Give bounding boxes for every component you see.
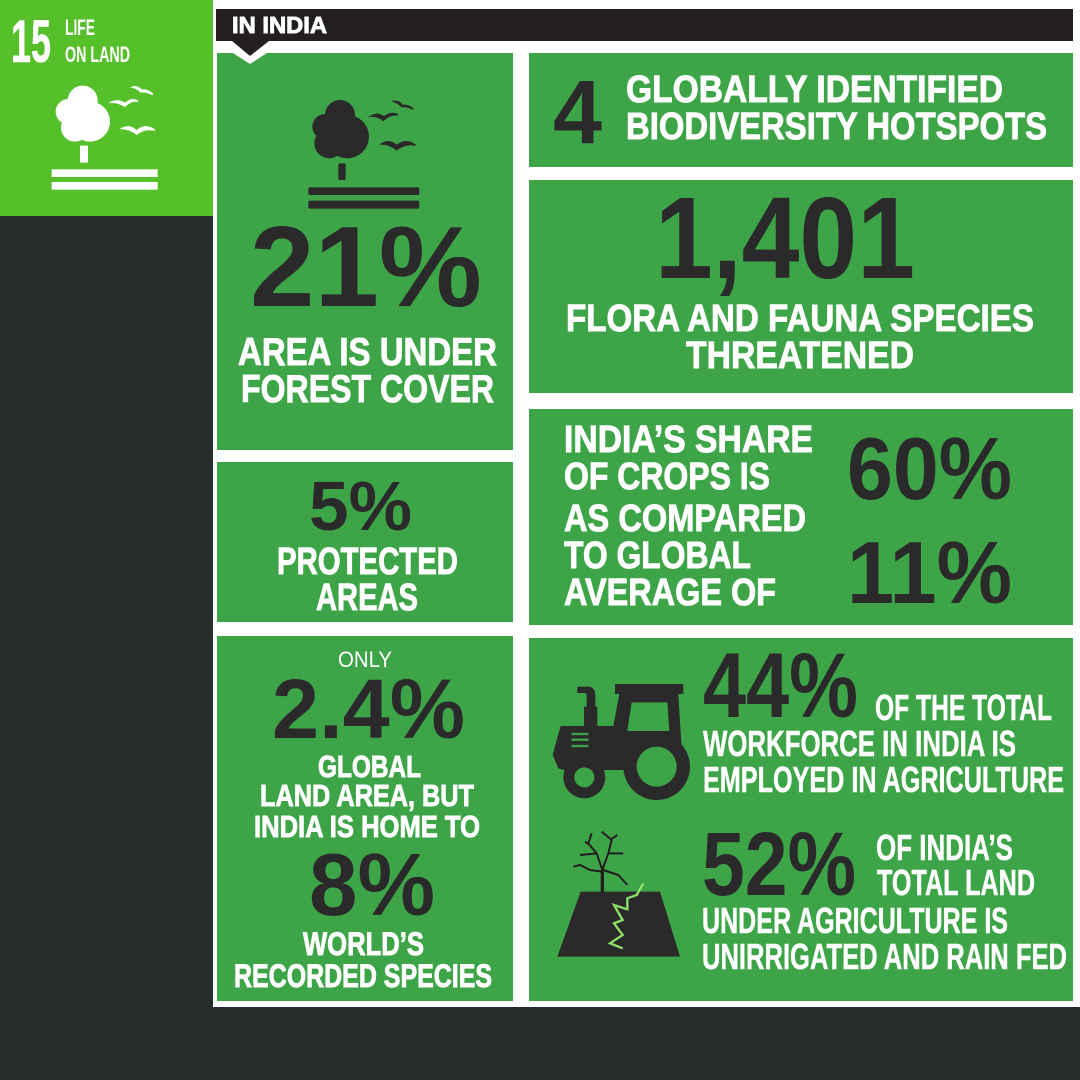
badge title (65, 15, 130, 67)
stat: 52%: 52% (702, 815, 856, 915)
panel: share of crops (529, 409, 1073, 625)
stat: 1,401: 1,401 (655, 173, 915, 303)
label: only: ONLY (338, 647, 392, 672)
caption: share of crops: INDIA’S SHARE (564, 419, 813, 461)
caption: forest cover: AREA IS UNDER (238, 331, 497, 374)
caption: share of crops: OF CROPS IS (564, 456, 770, 498)
SDG 15 badge (0, 0, 213, 216)
caption: global land area: GLOBAL (318, 749, 421, 784)
caption: forest cover (238, 331, 497, 411)
caption: hotspots (626, 69, 1047, 148)
panel: global land area and species (217, 636, 513, 1001)
icon: tractor (553, 684, 690, 800)
panel: threatened species (529, 173, 1073, 393)
caption: share of crops: AS COMPARED (564, 498, 806, 540)
panel: agriculture (529, 635, 1073, 1001)
caption: threatened species (566, 298, 1034, 377)
caption: share of crops: AVERAGE OF (564, 572, 776, 614)
stat: 60%: 60% (847, 419, 1012, 518)
caption: workforce (703, 687, 1064, 800)
caption: protected areas (277, 541, 458, 619)
caption: recorded species (234, 926, 492, 994)
icon: dark tree and birds (308, 100, 419, 209)
stat: 11%: 11% (847, 523, 1012, 622)
stat: 5%: 5% (309, 467, 412, 545)
panel: biodiversity hotspots (529, 53, 1073, 167)
stat: 4: 4 (553, 63, 602, 163)
caption: global land area: INDIA IS HOME TO (254, 809, 480, 844)
header label: IN INDIA (232, 12, 327, 38)
caption: share of crops (564, 419, 813, 614)
caption: hotspots: GLOBALLY IDENTIFIED (626, 69, 1003, 111)
stat: 44%: 44% (703, 635, 858, 737)
badge title: LIFE (65, 15, 95, 40)
panel: protected areas (217, 462, 513, 622)
stat: 2.4%: 2.4% (272, 662, 465, 756)
caption: recorded species: WORLD’S (303, 926, 424, 962)
caption: protected areas: PROTECTED (277, 541, 458, 583)
header bar: In India (216, 9, 1073, 56)
caption: unirrigated land: OF INDIA’S (876, 827, 1013, 868)
stat: 8%: 8% (309, 835, 435, 934)
caption: protected areas: AREAS (316, 577, 418, 619)
caption: threatened species: THREATENED (686, 335, 914, 377)
stat: 21%: 21% (250, 204, 482, 331)
badge title: ON LAND (65, 42, 130, 67)
white sheet behind panels (213, 0, 1080, 1007)
panel: forest cover (217, 53, 513, 450)
caption: share of crops: TO GLOBAL (564, 535, 751, 577)
caption: unirrigated land (702, 827, 1067, 977)
pointer (232, 41, 269, 56)
caption: forest cover: FOREST COVER (241, 368, 494, 411)
icon: white tree and birds (52, 86, 158, 190)
caption: global land area: LAND AREA, BUT (260, 778, 474, 813)
caption: global land area (254, 749, 480, 844)
badge number: 15 (11, 8, 51, 75)
caption: recorded species: RECORDED SPECIES (234, 958, 492, 994)
icon: dead tree on cracked land (557, 832, 680, 957)
